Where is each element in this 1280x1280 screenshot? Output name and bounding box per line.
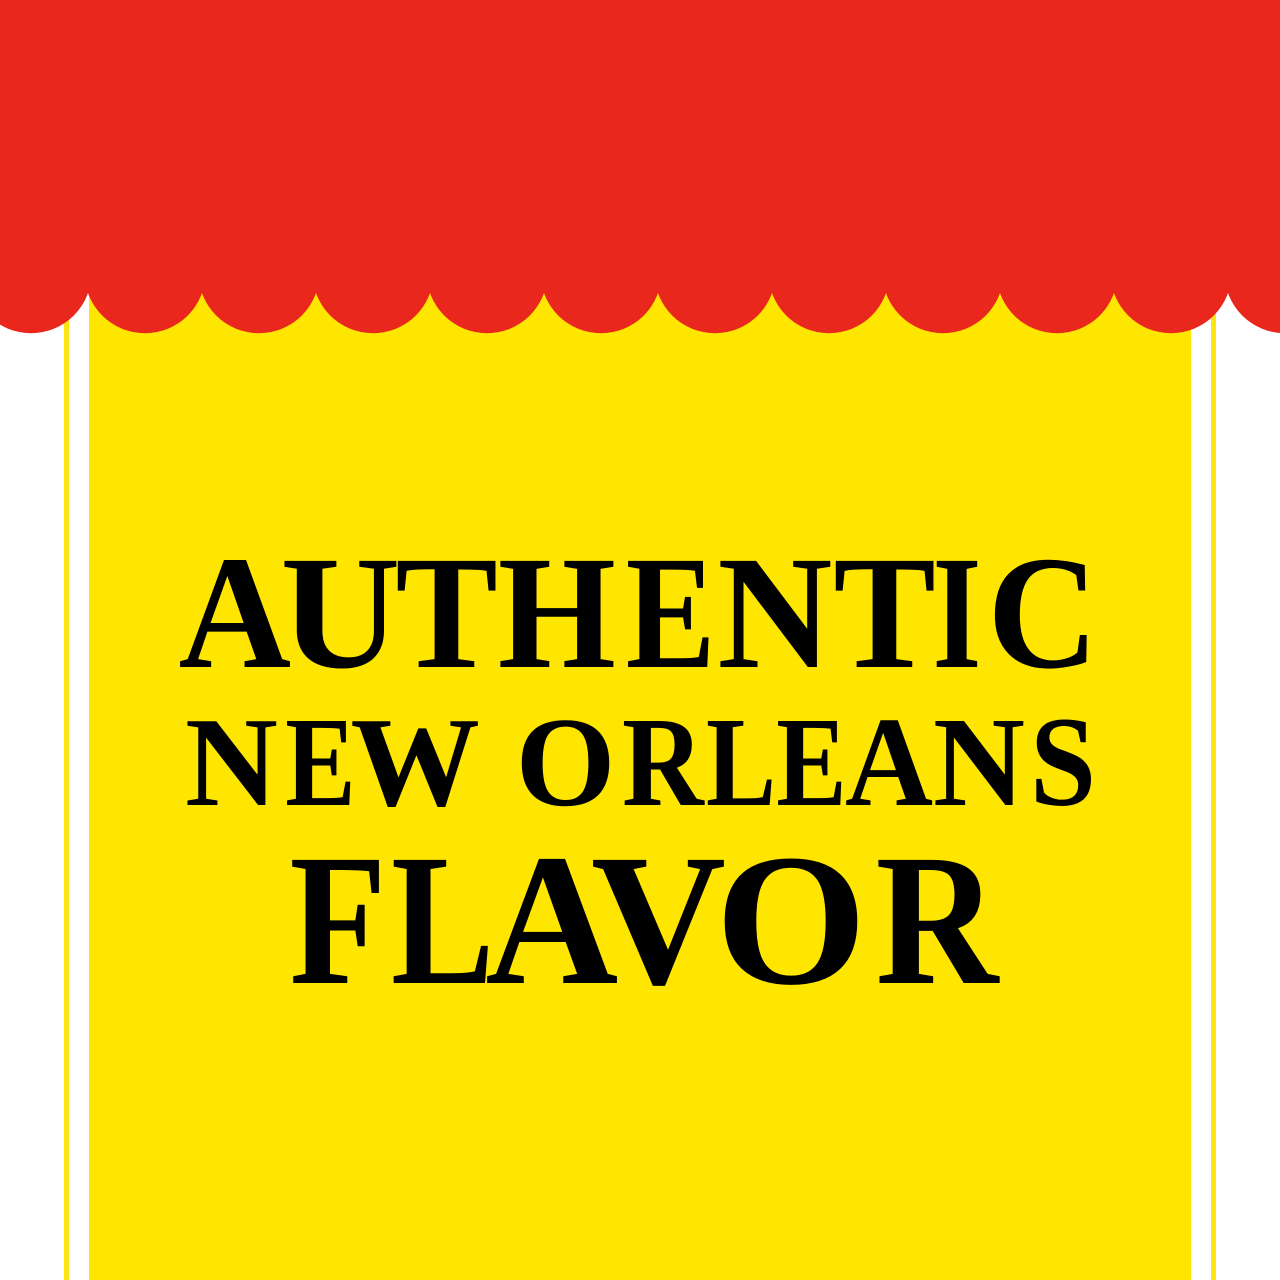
headline line 1: C (987, 524, 1098, 703)
headline line 3: V (591, 815, 726, 1024)
headline line 1: T (395, 524, 498, 703)
headline line 1: E (626, 524, 715, 703)
headline line 1: N (717, 524, 832, 703)
red scalloped awning (0, 0, 1280, 333)
headline line 1: H (498, 524, 616, 703)
right thin yellow stripe (1211, 310, 1216, 1280)
yellow panel (89, 290, 1191, 1280)
headline line 2: R (622, 691, 705, 833)
headline line 1: T (833, 524, 936, 703)
headline line 2: A (845, 691, 933, 833)
headline line 2: O (516, 691, 616, 833)
headline line 3: O (715, 815, 867, 1024)
headline line 1: A (179, 524, 291, 703)
left thin yellow stripe (64, 310, 69, 1280)
headline line 3: R (876, 815, 1000, 1024)
headline line 2: N (185, 691, 278, 833)
headline line 2: E (285, 691, 356, 833)
headline line 2: N (933, 691, 1025, 833)
headline (179, 524, 1098, 1024)
headline line 1: U (280, 524, 400, 703)
headline line 1: I (932, 524, 981, 703)
headline line 2: W (350, 691, 478, 833)
headline line 3: F (290, 815, 386, 1024)
headline line 2: E (776, 691, 847, 833)
headline line 2: S (1030, 691, 1096, 833)
headline line 2: L (706, 691, 776, 833)
headline line 3: A (485, 815, 618, 1024)
headline line 3: L (391, 815, 494, 1024)
